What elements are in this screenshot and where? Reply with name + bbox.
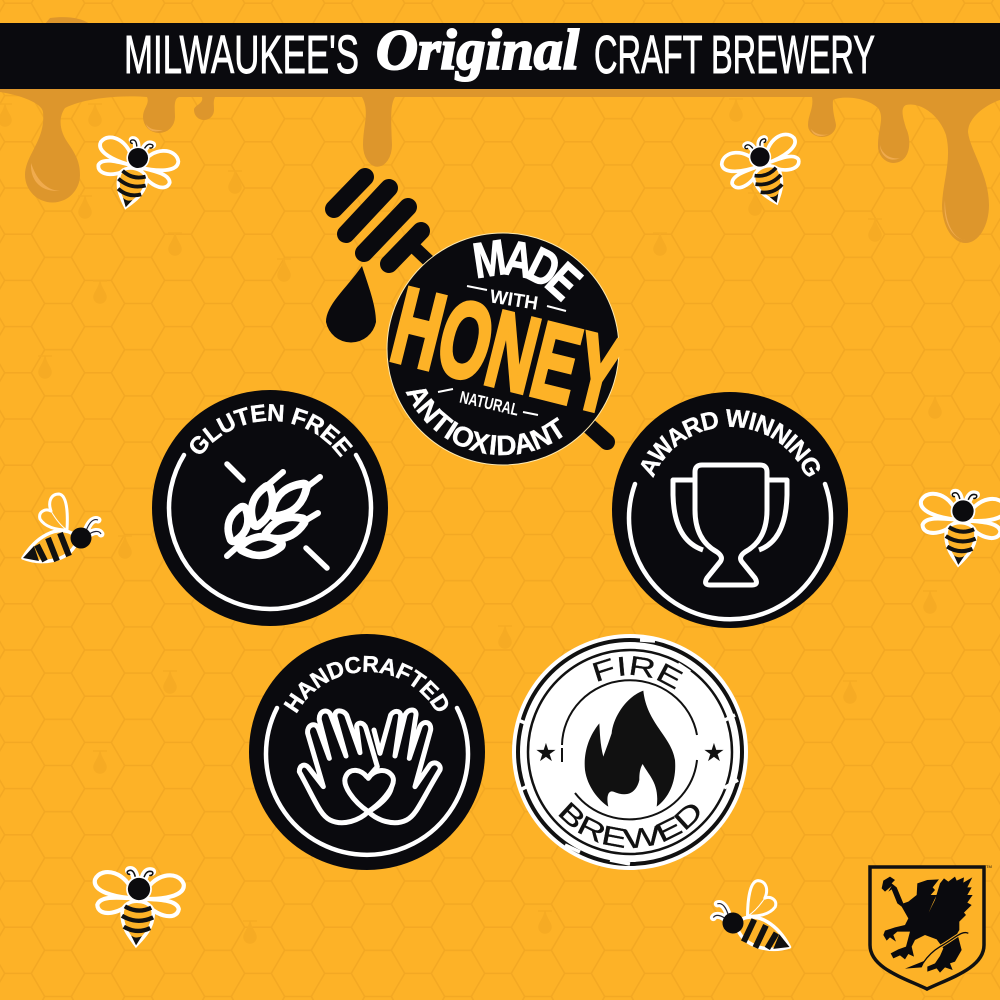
badge: handcrafted (249, 634, 485, 870)
handcrafted label: HANDCRAFTED (284, 656, 448, 714)
fire label: FIRE (592, 656, 683, 690)
bee: middle left (23, 494, 101, 561)
honey drips (0, 17, 1000, 243)
brewed label: BREWED (558, 802, 700, 848)
text: antioxidant: I (488, 429, 499, 461)
top banner (0, 23, 1000, 89)
text: antioxidant: T (540, 412, 571, 448)
badge: award winning (612, 392, 848, 628)
text: antioxidant: X (467, 425, 493, 460)
icon: trophy (673, 465, 787, 585)
award winning label: AWARD WINNING (640, 409, 820, 478)
text: antioxidant: A (511, 426, 537, 461)
text: made: A (500, 229, 538, 290)
stamp wear marks (518, 640, 738, 864)
bee: bottom left (92, 868, 184, 948)
text: made (469, 228, 593, 311)
icon: strike marks (227, 464, 327, 568)
icon: stars (535, 738, 725, 767)
bee: bottom right (711, 878, 794, 950)
dipper handle and grooves (334, 177, 607, 442)
honey drop (326, 266, 376, 342)
banner text: Milwaukee's: MILWAUKEE'S (124, 25, 359, 85)
text: antioxidant: N (411, 393, 447, 429)
text: antioxidant: T (424, 406, 457, 440)
brewery shield logo (870, 864, 992, 989)
icon: wheat (227, 472, 320, 556)
griffin silhouette (882, 877, 973, 973)
bee: middle right (916, 490, 1000, 569)
icon: stars: ★ (535, 738, 557, 767)
bee: top left (87, 132, 181, 217)
gluten free label: GLUTEN FREE (190, 404, 353, 458)
text: made: E (535, 251, 593, 311)
icon: flame (585, 691, 675, 807)
text: antioxidant: A (400, 379, 437, 412)
banner text: Original: Original (376, 19, 579, 82)
text: antioxidant: N (526, 419, 556, 456)
text: with: WITH (488, 286, 539, 315)
badge: gluten free (152, 390, 388, 626)
text: antioxidant: O (447, 418, 479, 455)
icon: stars: ★ (703, 738, 725, 767)
badge disc (387, 233, 619, 465)
text: antioxidant (400, 379, 571, 461)
text: antioxidant: I (440, 415, 463, 446)
trademark: TM (986, 864, 992, 869)
text: antioxidant: D (496, 430, 517, 461)
text: made: D (518, 236, 569, 299)
text: natural: NATURAL (458, 388, 521, 420)
honey dipper badge (326, 177, 634, 465)
bee: top right (718, 129, 813, 216)
badge: fire brewed stamp (512, 634, 748, 870)
text: made: M (469, 228, 510, 289)
text: honey: HONEY (381, 264, 634, 437)
icon: hands and heart (299, 710, 440, 823)
